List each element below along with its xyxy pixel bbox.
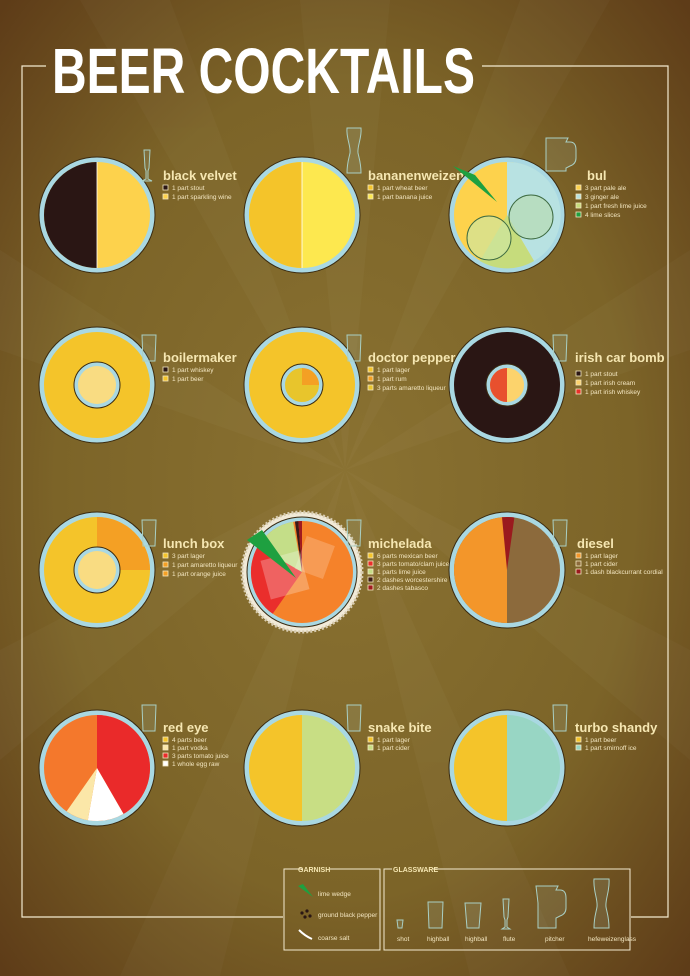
panel: irish car bomb: 1 part stout — [585, 371, 618, 378]
icon: pitcher — [546, 138, 576, 171]
panel: bul — [449, 138, 647, 273]
legend: glassware: shot — [397, 936, 409, 943]
panel: boilermaker: boilermaker — [163, 350, 237, 365]
panel: lunch box: 3 part lager — [172, 553, 206, 560]
icon: weizen glass — [347, 128, 361, 173]
legend: glassware: flute — [503, 936, 516, 943]
panel: red eye: 1 part vodka — [172, 745, 208, 752]
icon: highball — [553, 335, 567, 361]
panel: irish car bomb: irish car bomb — [575, 350, 665, 365]
panel: michelada: 6 parts mexican beer — [377, 553, 439, 560]
legend: glassware: highball — [427, 936, 450, 943]
legend: glassware: highball — [465, 936, 488, 943]
panel: doctor pepper: 1 part rum — [377, 376, 407, 383]
panel: michelada: 3 parts tomato/clam juice — [377, 561, 450, 568]
icon: highball — [347, 520, 361, 546]
panel: irish car bomb: 1 part irish cream — [585, 380, 635, 387]
panel: irish car bomb — [449, 327, 665, 443]
icon: highball — [553, 705, 567, 731]
panel: snake bite: 1 part lager — [377, 737, 411, 744]
panel: doctor pepper: 1 part lager — [377, 367, 411, 374]
legend: garnish: lime wedge — [318, 891, 351, 898]
legend: glassware: pitcher — [545, 936, 565, 943]
panel: diesel: diesel — [577, 536, 614, 551]
panel: lunch box: 1 part orange juice — [172, 571, 226, 578]
icon: highball — [553, 520, 567, 546]
panel: bul: 1 part fresh lime juice — [585, 203, 647, 210]
panel: snake bite — [244, 705, 432, 826]
panel: doctor pepper: doctor pepper — [368, 350, 455, 365]
icon: highball — [142, 335, 156, 361]
legend: garnish: coarse salt — [318, 935, 350, 942]
panel: red eye — [39, 705, 229, 826]
legend: glassware — [384, 867, 637, 950]
panel: doctor pepper: 3 parts amaretto liqueur — [377, 385, 446, 392]
panel: bananenweizen — [244, 128, 464, 273]
icon: lime wedge — [453, 166, 497, 202]
panel: michelada: 2 dashes tabasco — [377, 585, 428, 592]
panel: michelada — [242, 512, 450, 632]
panel: red eye: red eye — [163, 720, 209, 735]
legend: glassware: hefeweizenglass — [588, 936, 637, 943]
panel: doctor pepper — [244, 327, 455, 443]
panel: black velvet — [39, 150, 237, 273]
panel: diesel: 1 part lager — [585, 553, 619, 560]
panel: bananenweizen: 1 part wheat beer — [377, 185, 428, 192]
icon: highball — [142, 520, 156, 546]
panel: boilermaker: 1 part whiskey — [172, 367, 214, 374]
panel: turbo shandy: turbo shandy — [575, 720, 658, 735]
panel: lunch box: lunch box — [163, 536, 225, 551]
panel: michelada: 1 parts lime juice — [377, 569, 426, 576]
panel: turbo shandy — [449, 705, 658, 826]
panel: red eye: 1 whole egg raw — [172, 761, 220, 768]
panel: black velvet: 1 part sparkling wine — [172, 194, 232, 201]
panel: boilermaker — [39, 327, 237, 443]
panel: snake bite: 1 part cider — [377, 745, 410, 752]
icon: highball — [347, 705, 361, 731]
panel: diesel: 1 dash blackcurrant cordial — [585, 569, 663, 576]
legend: garnish: ground black pepper — [318, 912, 378, 919]
panel: red eye: 4 parts beer — [172, 737, 208, 744]
icon: flute — [142, 150, 152, 181]
panel: snake bite: snake bite — [368, 720, 432, 735]
panel: boilermaker: 1 part beer — [172, 376, 204, 383]
legend: garnish: GARNISH — [298, 867, 330, 874]
panel: lunch box: 1 part amaretto liqueur — [172, 562, 238, 569]
panel: red eye: 3 parts tomato juice — [172, 753, 229, 760]
panel: black velvet: 1 part stout — [172, 185, 205, 192]
panel: michelada: michelada — [368, 536, 432, 551]
panel: turbo shandy: 1 part beer — [585, 737, 617, 744]
panel: michelada: 2 dashes worcestershire — [377, 577, 448, 584]
icon: highball — [142, 705, 156, 731]
panel: bul: 4 lime slices — [585, 212, 621, 219]
legend: garnish — [284, 867, 380, 950]
panel: bul: 3 ginger ale — [585, 194, 619, 201]
icon: lime wedge — [247, 530, 296, 578]
panel: diesel — [449, 512, 663, 628]
legend: glassware: GLASSWARE — [393, 867, 438, 874]
icon: highball — [347, 335, 361, 361]
panel: lunch box — [39, 512, 238, 628]
panel: bul: bul — [587, 168, 606, 183]
panel: bul: 3 part pale ale — [585, 185, 627, 192]
panel: turbo shandy: 1 part smirnoff ice — [585, 745, 637, 752]
panel: diesel: 1 part cider — [585, 561, 618, 568]
panel: black velvet: black velvet — [163, 168, 237, 183]
panel: bananenweizen: bananenweizen — [368, 168, 464, 183]
panel: irish car bomb: 1 part irish whiskey — [585, 389, 641, 396]
title: BEER COCKTAILS — [52, 35, 475, 107]
panel: bananenweizen: 1 part banana juice — [377, 194, 433, 201]
